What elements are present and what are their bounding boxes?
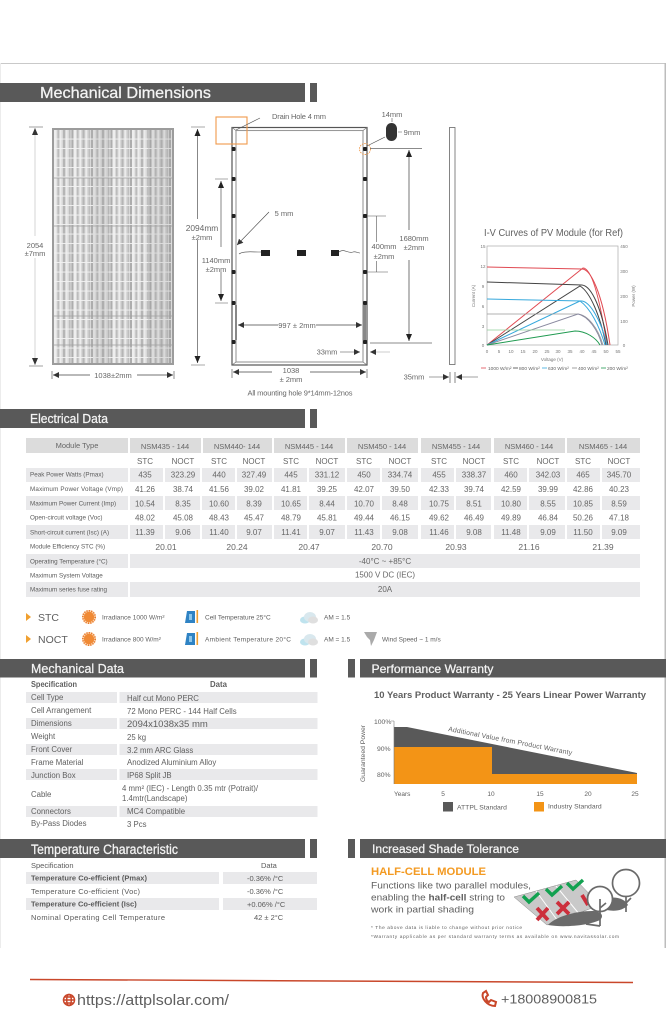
row labels: Maximum Power Voltage (Vmp) [30, 486, 123, 493]
table values: 39.25 [317, 485, 338, 494]
table: mechanical data: 4 mm² (IEC) - Length 0.35 mtr (Potrait)/ [122, 784, 259, 793]
icon: thermometer [185, 632, 198, 645]
table values: STC [575, 457, 591, 466]
table values: 11.50 [573, 528, 593, 537]
table: mechanical data: 1.4mtr(Landscape) [122, 794, 188, 803]
table values: 323.29 [171, 470, 196, 480]
legend: NOCT conditions: Irradiance 800 W/m² [102, 636, 162, 644]
table: temperature characteristic: Temperature Co-efficient (Pmax) [31, 874, 148, 882]
table: mechanical data [26, 680, 318, 829]
table values: 20.93 [445, 542, 467, 552]
table values: 10.65 [281, 500, 302, 508]
legend: NOCT conditions: NOCT [38, 634, 68, 646]
table values: 460 [504, 470, 518, 480]
chart: I-V curves [471, 227, 636, 372]
footnotes [371, 925, 619, 940]
icon: check marks [523, 880, 583, 902]
table shading [26, 468, 640, 597]
table values: STC [356, 457, 372, 466]
chart legend: 200 W/m² [607, 366, 628, 372]
chart: warranty: 10 [487, 791, 495, 798]
table values: 11.48 [501, 528, 521, 537]
table values: 435 [138, 470, 152, 480]
dimension: 2094 mm: ±2mm [192, 233, 212, 242]
chart legend [481, 366, 628, 372]
axis labels: 12 [480, 264, 486, 269]
table values: -40°C ~ +85°C [359, 557, 411, 566]
table values: 42.33 [429, 485, 450, 494]
table values: 11.40 [209, 528, 229, 537]
table header: NSM465 - 144 [579, 442, 627, 451]
table values: NOCT [172, 457, 194, 466]
table values: 20.70 [371, 542, 393, 552]
icon: shaded panels and trees [514, 870, 640, 926]
table values: 9.09 [540, 528, 556, 537]
heading: Increased Shade Tolerance [348, 839, 666, 858]
table values: 49.44 [354, 514, 375, 522]
dimension: height 2054: 2054 [27, 241, 43, 250]
table values: 10.60 [209, 500, 230, 508]
table values: 327.49 [242, 470, 267, 480]
heading: Temperature Characteristic [0, 839, 317, 858]
table values: 8.39 [246, 500, 262, 508]
table values: 10.80 [501, 500, 522, 508]
table values: 42.86 [573, 485, 594, 494]
heading: Mechanical Data: Mechanical Data [31, 661, 125, 676]
table values: 450 [357, 470, 371, 480]
dimension: 2094 mm [186, 127, 218, 365]
chart title: I-V Curves of PV Module (for Ref) [484, 227, 623, 239]
table values: 8.35 [175, 500, 191, 508]
footnotes: *Warranty applicable as per standard warranty terms as available on www.navitassolar.com [371, 934, 619, 940]
heading: Mechanical Dimensions: Mechanical Dimensions [40, 85, 211, 102]
table values: 47.18 [609, 514, 630, 522]
row labels [30, 472, 123, 594]
detail: mounting slot: 9mm [404, 128, 420, 137]
icon: cloud [300, 634, 318, 646]
dimension: 1680 mm: ±2mm [404, 243, 424, 252]
table values: 11.43 [354, 528, 374, 537]
table values: NOCT [316, 457, 338, 466]
table values: 46.15 [390, 514, 411, 522]
callout: 5 mm arrow [237, 209, 293, 245]
axis labels: 10 [508, 349, 514, 354]
icon: trees [586, 870, 640, 926]
axis labels: 50 [603, 349, 609, 354]
table values: 40.23 [609, 485, 630, 494]
table values: 20.01 [155, 542, 177, 552]
table values: 11.41 [281, 528, 301, 537]
table: mechanical data: Junction Box [31, 771, 76, 780]
chart legend: 400 W/m² [578, 366, 599, 372]
table values: 338.37 [462, 470, 487, 480]
dimension: 997 mm [238, 321, 362, 330]
heading: Electrical Data [0, 409, 317, 428]
chart legend: 630 W/m² [548, 366, 569, 372]
chart: warranty: 15 [536, 791, 544, 798]
legend: NOCT conditions: Wind Speed ~ 1 m/s [382, 636, 441, 644]
table: mechanical data: MC4 Compatible [127, 807, 185, 816]
table values: 49.89 [501, 514, 522, 522]
axis labels: 9 [482, 284, 485, 289]
table values: 39.99 [538, 485, 559, 494]
table: mechanical data: Data [210, 680, 228, 689]
divider: footer line [30, 980, 633, 982]
table: temperature characteristic [26, 861, 317, 922]
table values: 11.39 [135, 528, 155, 537]
chart: warranty: 100% [374, 719, 391, 726]
legend: STC conditions: STC [38, 612, 59, 624]
table values: 50.26 [573, 514, 594, 522]
table values: NOCT [537, 457, 559, 466]
icon: cross marks [537, 895, 588, 920]
legend: NOCT conditions: Ambient Temperature 20°C [205, 636, 291, 644]
dimension: 1680 mm: 1680mm [399, 234, 429, 243]
table: mechanical data: Cell Arrangement [31, 706, 92, 715]
table: mechanical data: Anodized Aluminium Alloy [127, 758, 216, 767]
callout: drain hole: Drain Hole 4 mm [272, 112, 326, 121]
axis labels: Voltage (V) [541, 357, 564, 362]
table values: 41.26 [135, 485, 156, 494]
table values: 45.81 [317, 514, 338, 522]
table values: 38.74 [173, 485, 194, 494]
footer: phone: +18008900815 [501, 992, 597, 1006]
text block: half-cell module: enabling the half-cell string to [371, 892, 505, 904]
table values: NOCT [608, 457, 630, 466]
chart legend [443, 802, 602, 812]
axis labels: Current (A) [471, 284, 476, 307]
table: temperature characteristic: Temperature Co-efficient (Voc) [31, 887, 140, 896]
table header [26, 438, 640, 453]
table header: NSM440- 144 [214, 442, 260, 451]
footnotes: * The above data is liable to change without prior notice [371, 925, 522, 931]
table values: 9.07 [246, 528, 262, 537]
table values: 465 [576, 470, 590, 480]
table values: NOCT [463, 457, 485, 466]
callout: orange highlight box [216, 117, 247, 144]
subtitle: warranty terms: 10 Years Product Warranty - 25 Years Linear Power Warranty [374, 690, 647, 701]
dimension: 33 mm: 33mm [317, 348, 337, 356]
table: mechanical data: Frame Material [31, 758, 84, 767]
legend: STC conditions: AM = 1.5 [324, 614, 351, 622]
table values: 48.79 [281, 514, 302, 522]
row labels: Open-circuit voltage (Voc) [30, 514, 102, 522]
axis labels: 0 [482, 343, 485, 348]
table values: 8.44 [319, 500, 335, 508]
table: temperature characteristic: -0.36% /°C [247, 887, 284, 896]
heading: Performance Warranty [348, 659, 666, 678]
junction boxes and cables [239, 250, 360, 256]
heading: Increased Shade Tolerance: Increased Shade Tolerance [372, 844, 519, 856]
table values: 342.03 [536, 470, 561, 480]
table values: 21.16 [518, 542, 540, 552]
table values: 42.59 [501, 485, 522, 494]
chart: warranty: 90% [377, 746, 391, 753]
dimension: 1140 mm [202, 179, 230, 303]
table values: 10.75 [429, 500, 450, 508]
panel: side view and 35 mm dimension: 35mm [404, 372, 424, 382]
chart: warranty: Guaranteed Power [360, 724, 367, 782]
table values: 46.49 [464, 514, 485, 522]
axis labels: 15 [520, 349, 526, 354]
table: mechanical data: Weight [31, 732, 56, 741]
dimension: 400 mm [367, 216, 397, 272]
chart annotation: Additional Value from Product Warranty [448, 726, 573, 757]
footer: website: https://attplsolar.com/ [77, 992, 230, 1009]
row labels: Operating Temperature (°C) [30, 558, 108, 566]
dimension: height 2054: ±7mm [25, 249, 45, 258]
table header: NSM460 - 144 [505, 442, 553, 451]
heading: Temperature Characteristic: Temperature Characteristic [31, 842, 178, 857]
table: mechanical data: 25 kg [127, 733, 146, 742]
table: mechanical data: 2094x1038x35 mm [127, 719, 208, 730]
icon: phone [483, 991, 496, 1006]
table values: 8.59 [611, 500, 627, 508]
axis labels: 300 [620, 269, 628, 274]
heading: Mechanical Data [0, 659, 317, 678]
chart: warranty: 25 [631, 791, 639, 798]
table values: STC [211, 457, 227, 466]
table values: 455 [432, 470, 446, 480]
table values: 9.08 [392, 528, 408, 537]
icon: cloud [300, 612, 318, 624]
chart: warranty [360, 719, 639, 812]
row labels: Short-circuit current (Isc) (A) [30, 530, 109, 536]
chart legend: 1000 W/m² [488, 366, 512, 372]
table values: 9.08 [466, 528, 482, 537]
row labels: Peak Power Watts (Pmax) [30, 472, 104, 478]
icon: sun [82, 610, 96, 624]
table values: STC [283, 457, 299, 466]
dimension: 400 mm: ±2mm [374, 252, 394, 261]
table: mechanical data: By-Pass Diodes [31, 819, 87, 828]
table values: 49.62 [429, 514, 450, 522]
table values: 345.70 [607, 470, 632, 480]
panel: side view and 35 mm dimension [404, 128, 478, 383]
table: temperature characteristic: Nominal Operating Cell Temperature [31, 913, 165, 922]
table: temperature characteristic: Specification [31, 861, 74, 870]
heading: Electrical Data: Electrical Data [30, 412, 108, 426]
table values: 45.47 [244, 514, 265, 522]
table values: 11.46 [429, 528, 449, 537]
chart: warranty: 80% [377, 772, 391, 779]
axis labels: 30 [555, 349, 561, 354]
axis labels: 20 [532, 349, 538, 354]
table: mechanical data: Connectors [31, 807, 71, 816]
dimension: 1038 mm: ± 2mm [280, 375, 302, 384]
dimension: width 1038 of front view: 1038±2mm [94, 371, 132, 380]
chart legend: 800 W/m² [519, 366, 540, 372]
table: mechanical data: IP68 Split JB [127, 771, 172, 780]
text block: half-cell module: Functions like two parallel modules, [371, 880, 531, 892]
axis labels: 55 [615, 349, 621, 354]
table: mechanical data: 72 Mono PERC - 144 Half Cells [127, 707, 237, 716]
table values: 48.43 [209, 514, 230, 522]
table values: 10.70 [354, 500, 375, 508]
dimension: height 2054 [25, 127, 45, 366]
axis labels: 40 [579, 349, 585, 354]
table values: 10.54 [135, 500, 156, 508]
axis labels: 45 [591, 349, 597, 354]
table values: STC [137, 457, 153, 466]
dimension: width 1038 of front view [52, 371, 174, 380]
table: temperature characteristic: Data [261, 861, 278, 870]
axis labels: 25 [544, 349, 550, 354]
table values: 331.12 [315, 470, 340, 480]
icon: thermometer [185, 610, 198, 623]
row labels: Maximum System Voltage [30, 572, 103, 580]
table: mechanical data: 3.2 mm ARC Glass [127, 746, 193, 755]
chart legend: ATTPL Standard [457, 804, 507, 812]
axis labels: 5 [498, 349, 501, 354]
table values: 9.09 [611, 528, 627, 537]
dimension: 1680 mm [370, 148, 432, 343]
table: mechanical data: 3 Pcs [127, 820, 147, 829]
table header: NSM455 - 144 [432, 442, 480, 451]
table values: 21.39 [592, 542, 614, 552]
table: mechanical data: Cable [31, 790, 51, 799]
table values: 20.24 [226, 542, 248, 552]
legend: STC conditions: Cell Temperature 25°C [205, 614, 271, 622]
table values: 48.02 [135, 514, 156, 522]
table values: 39.50 [390, 485, 411, 494]
table values: 1500 V DC (IEC) [355, 570, 415, 580]
legend: STC conditions: Irradiance 1000 W/m² [102, 614, 165, 622]
note: mounting holes: All mounting hole 9*14mm-12nos [248, 388, 353, 398]
table values: 8.48 [392, 500, 408, 508]
table values: 9.06 [175, 528, 191, 537]
table values: NOCT [389, 457, 411, 466]
axis labels: 15 [480, 244, 486, 249]
table: mechanical data: Front Cover [31, 745, 73, 754]
table: temperature characteristic: +0.06% /°C [247, 900, 286, 909]
text block: half-cell module: HALF-CELL MODULE [371, 866, 486, 878]
table header: NSM445 - 144 [285, 442, 333, 451]
callout: drain hole [236, 112, 326, 130]
icon: globe [64, 994, 74, 1006]
legend: NOCT conditions: AM = 1.5 [324, 636, 351, 644]
table values: 39.74 [464, 485, 485, 494]
table values: 41.81 [281, 485, 302, 494]
dimension: 1140 mm: 1140mm [202, 256, 230, 265]
table: temperature characteristic: -0.36% /°C [247, 874, 284, 883]
axis labels: 6 [482, 304, 485, 309]
table values: 440 [212, 470, 226, 480]
dimension: 2094 mm: 2094mm [186, 223, 218, 233]
legend: STC conditions [26, 610, 351, 624]
detail: mounting slot [360, 110, 420, 154]
dimension: 1140 mm: ±2mm [206, 265, 226, 274]
text block: half-cell module [370, 866, 531, 916]
axis labels: 3 [482, 324, 485, 329]
axis labels: 100 [620, 319, 628, 324]
dimension: 1038 mm [232, 366, 367, 384]
table values: NOCT [243, 457, 265, 466]
table values: 445 [284, 470, 298, 480]
chart: warranty: 5 [441, 791, 445, 798]
heading: Mechanical Dimensions [0, 83, 317, 102]
table values: 20A [378, 585, 393, 594]
detail: mounting slot: 14mm [382, 110, 402, 119]
table header: NSM435 - 144 [141, 442, 189, 451]
axis labels: 0 [486, 349, 489, 354]
table: mechanical data: Cell Type [31, 693, 63, 702]
heading: Performance Warranty: Performance Warranty [372, 662, 494, 676]
axis labels: Power (W) [631, 285, 636, 307]
table: mechanical data: Specification [31, 680, 77, 689]
row labels: Maximum Power Current (Imp) [30, 500, 116, 508]
axis labels: 0 [623, 343, 626, 348]
table values: 334.74 [388, 470, 413, 480]
table values: 20.47 [298, 542, 320, 552]
table: mechanical data: Half cut Mono PERC [127, 694, 199, 703]
dimension: 400 mm: 400mm [371, 242, 397, 251]
table values [135, 457, 632, 594]
panel: rear frame drawing [186, 110, 478, 398]
callout: 5 mm arrow: 5 mm [275, 209, 293, 218]
axis labels: 450 [620, 244, 628, 249]
table: mechanical data: Dimensions [31, 719, 72, 728]
table: electrical data [26, 438, 640, 597]
chart: warranty: 20 [584, 791, 592, 798]
dimension: 997 mm: 997 ± 2mm [278, 321, 316, 330]
chart legend: Industry Standard [548, 804, 602, 810]
table header: Module Type [56, 441, 98, 450]
text block: half-cell module: work in partial shading [370, 904, 474, 916]
axis labels: 200 [620, 294, 628, 299]
table header: NSM450 - 144 [358, 442, 406, 451]
row labels: Maximum series fuse rating [30, 586, 107, 594]
table values: 41.56 [209, 485, 230, 494]
table values: STC [503, 457, 519, 466]
table values: 10.85 [573, 500, 594, 508]
icon: wind [364, 632, 377, 646]
table: temperature characteristic: Temperature Co-efficient (Isc) [31, 900, 137, 908]
table values: STC [431, 457, 447, 466]
table values: 45.08 [173, 514, 194, 522]
panel: front view of module [25, 127, 174, 366]
axis labels [471, 244, 636, 362]
chart: warranty: Years [394, 791, 411, 798]
table values: 39.02 [244, 485, 265, 494]
table values: 9.07 [319, 528, 335, 537]
dimension: 1038 mm: 1038 [283, 366, 299, 375]
table values: 42.07 [354, 485, 375, 494]
icon: sun [82, 632, 96, 646]
axis labels: 35 [567, 349, 573, 354]
row labels: Module Efficiency STC (%) [30, 544, 105, 550]
table values: 8.51 [466, 500, 482, 508]
table values: 8.55 [540, 500, 556, 508]
dimension: 33 mm [317, 348, 390, 356]
table: temperature characteristic: 42 ± 2°C [254, 913, 284, 922]
legend: NOCT conditions [26, 632, 441, 646]
table values: 46.84 [538, 514, 559, 522]
